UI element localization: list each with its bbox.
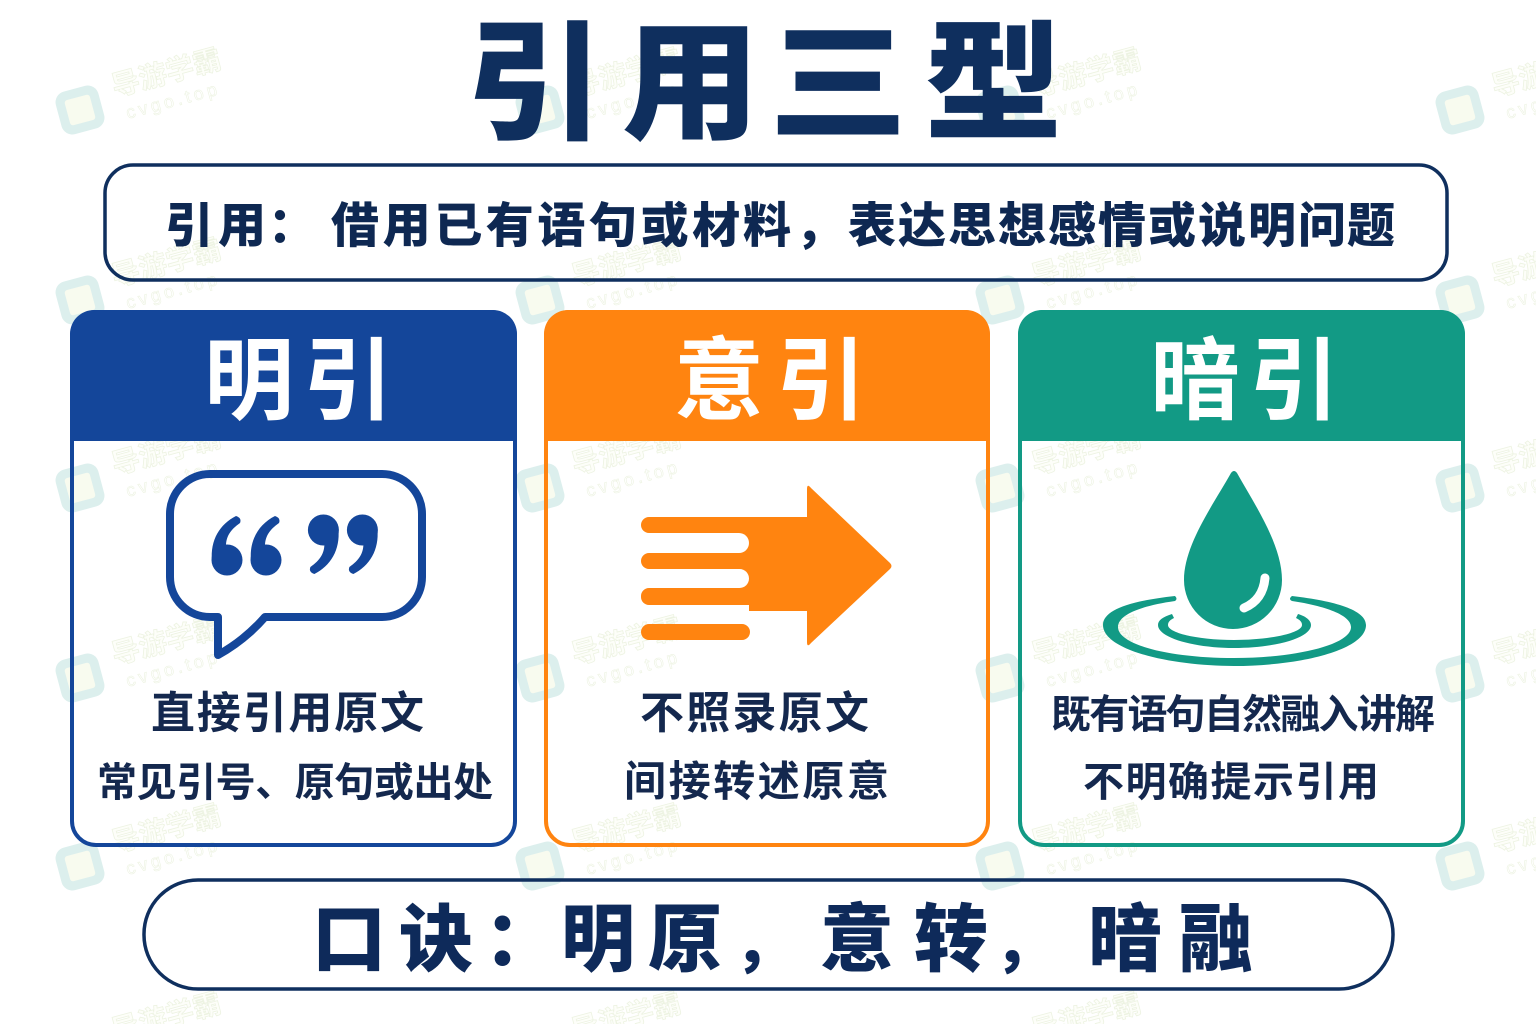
definition text: 引用：借用已有语句或材料，表达思想感情或说明问题 xyxy=(165,200,1395,253)
heading: 意引: 意引 xyxy=(674,332,866,432)
watermark layer: cvgo.top xyxy=(1044,834,1143,879)
mnemonic text: ， xyxy=(734,911,794,978)
mnemonic box xyxy=(144,880,1393,989)
panel header: 明引 xyxy=(70,310,517,441)
watermark layer: 导游学霸 xyxy=(108,799,224,858)
watermark layer: 导游学霸 xyxy=(1028,421,1144,480)
watermark layer: cvgo.top xyxy=(1044,78,1143,123)
watermark layer: cvgo.top xyxy=(584,456,683,501)
watermark layer: 导游学霸 xyxy=(108,421,224,480)
watermark layer: 导游学霸 xyxy=(108,611,224,670)
watermark layer: 导游学霸 xyxy=(568,421,684,480)
panel: 意引 xyxy=(544,310,990,845)
mnemonic text: 暗融 xyxy=(1088,898,1253,981)
heading: 暗引: 暗引 xyxy=(1150,332,1339,432)
panel text: 意引: 间接转述原意 xyxy=(624,758,889,805)
panel header: 意引 xyxy=(544,310,990,441)
watermark layer: 导游学霸 xyxy=(568,799,684,858)
heading: 明引: 明引 xyxy=(204,332,393,432)
icon: water drop with ripples xyxy=(1103,471,1366,666)
watermark layer: cvgo.top xyxy=(584,268,683,313)
panel text: 暗引 xyxy=(1051,693,1435,805)
icon: speech bubble with quotes xyxy=(170,474,422,655)
watermark layer: cvgo.top xyxy=(124,78,223,123)
watermark layer: 导游学霸 xyxy=(1028,43,1144,102)
watermark layer: cvgo.top xyxy=(1044,268,1143,313)
watermark layer: 导游学霸 xyxy=(568,233,684,292)
watermark layer: cvgo.top xyxy=(1044,646,1143,691)
panel text: 明引 xyxy=(97,689,493,805)
panel text: 意引 xyxy=(624,689,889,805)
watermark layer: cvgo.top xyxy=(584,646,683,691)
title: 引用三型 xyxy=(466,13,1063,157)
watermark layer: cvgo.top xyxy=(124,646,223,691)
watermark layer: 导游学霸 xyxy=(108,43,224,102)
panel header: 暗引 xyxy=(1018,310,1465,441)
mnemonic text: 意转 xyxy=(820,898,988,981)
panel text: 明引: 常见引号、原句或出处 xyxy=(97,761,493,805)
watermark layer: 导游学霸 xyxy=(1028,799,1144,858)
watermark layer: 导游学霸 xyxy=(1028,233,1144,292)
watermark layer: cvgo.top xyxy=(584,834,683,879)
panel: 明引 xyxy=(70,310,517,845)
icon: arrow with speed lines xyxy=(641,486,892,645)
panel text: 明引: 直接引用原文 xyxy=(151,689,424,738)
panel text: 暗引: 既有语句自然融入讲解 xyxy=(1051,693,1435,737)
watermark layer: cvgo.top xyxy=(1044,456,1143,501)
watermark layer: 导游学霸 xyxy=(568,43,684,102)
watermark layer: cvgo.top xyxy=(124,456,223,501)
watermark layer: cvgo.top xyxy=(124,268,223,313)
watermark layer: 导游学霸 xyxy=(108,233,224,292)
mnemonic text: 口诀：明原 xyxy=(312,898,722,981)
watermark layer: cvgo.top xyxy=(584,78,683,123)
panel: 暗引 xyxy=(1018,310,1465,845)
definition box xyxy=(105,165,1447,280)
panel text: 暗引: 不明确提示引用 xyxy=(1083,759,1379,805)
panel text: 意引: 不照录原文 xyxy=(640,689,869,738)
watermark layer: 导游学霸 xyxy=(568,611,684,670)
watermark layer: cvgo.top xyxy=(124,834,223,879)
watermark layer: 导游学霸 xyxy=(1028,611,1144,670)
mnemonic text: ， xyxy=(994,911,1054,978)
